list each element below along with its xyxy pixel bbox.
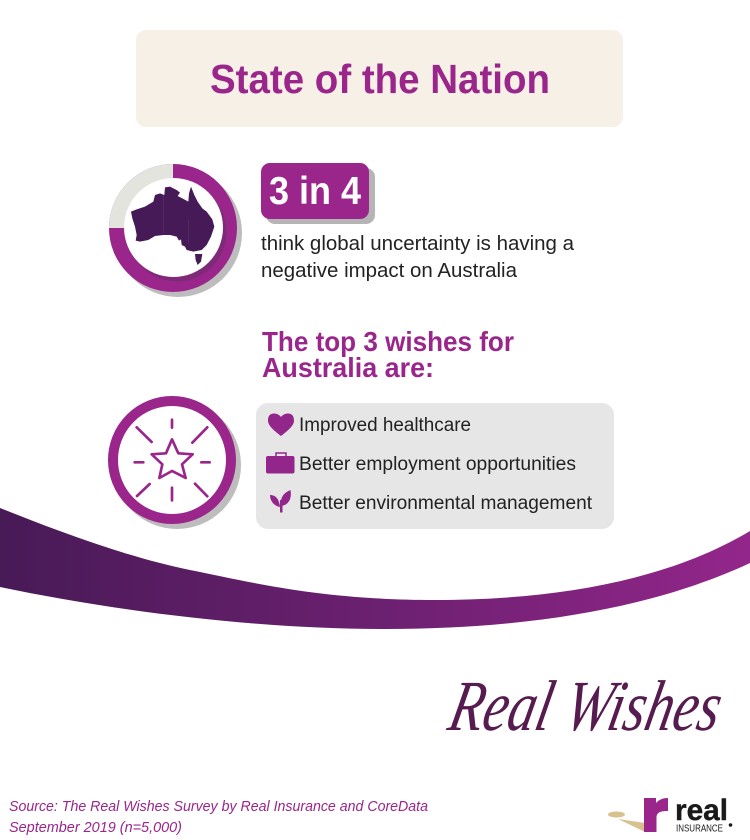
- logo: Real Insurance: real: [675, 794, 728, 827]
- decorative swoosh: [0, 508, 750, 629]
- title banner: [136, 30, 623, 127]
- wish 1: Improved healthcare: [299, 415, 471, 436]
- icon: star in ring: [113, 401, 241, 529]
- source note: [9, 798, 428, 836]
- subheading: top 3 wishes: [262, 326, 514, 383]
- logo: Real Insurance: INSURANCE: [676, 824, 723, 834]
- subheading: top 3 wishes: Australia are:: [262, 352, 434, 383]
- wish 3: Better environmental management: [299, 493, 593, 514]
- stat badge: 3 in 4: [261, 163, 375, 224]
- icon: sprout: [270, 490, 291, 512]
- wish 2: Better employment opportunities: [299, 454, 576, 475]
- title: State of the Nation: [210, 56, 550, 102]
- logo: Real Insurance: [608, 794, 732, 834]
- icon: heart: [268, 414, 294, 436]
- panel: top 3 wishes list: [256, 403, 614, 529]
- stat description: think global uncertainty is having a: [261, 233, 575, 255]
- icon: map of Australia: [131, 187, 214, 265]
- source note: September 2019 (n=5,000): [9, 819, 182, 836]
- subheading: top 3 wishes: The top 3 wishes for: [262, 326, 514, 357]
- icon: briefcase: [266, 453, 294, 474]
- source note: Source: The Real Wishes Survey by Real Insurance and CoreData: [9, 798, 428, 815]
- stat description: negative impact on Australia: [261, 260, 518, 282]
- stat badge: 3 in 4: 3 in 4: [269, 170, 361, 213]
- icon: Australia donut chart, 3 in 4: [109, 164, 242, 297]
- stat description: [261, 233, 575, 282]
